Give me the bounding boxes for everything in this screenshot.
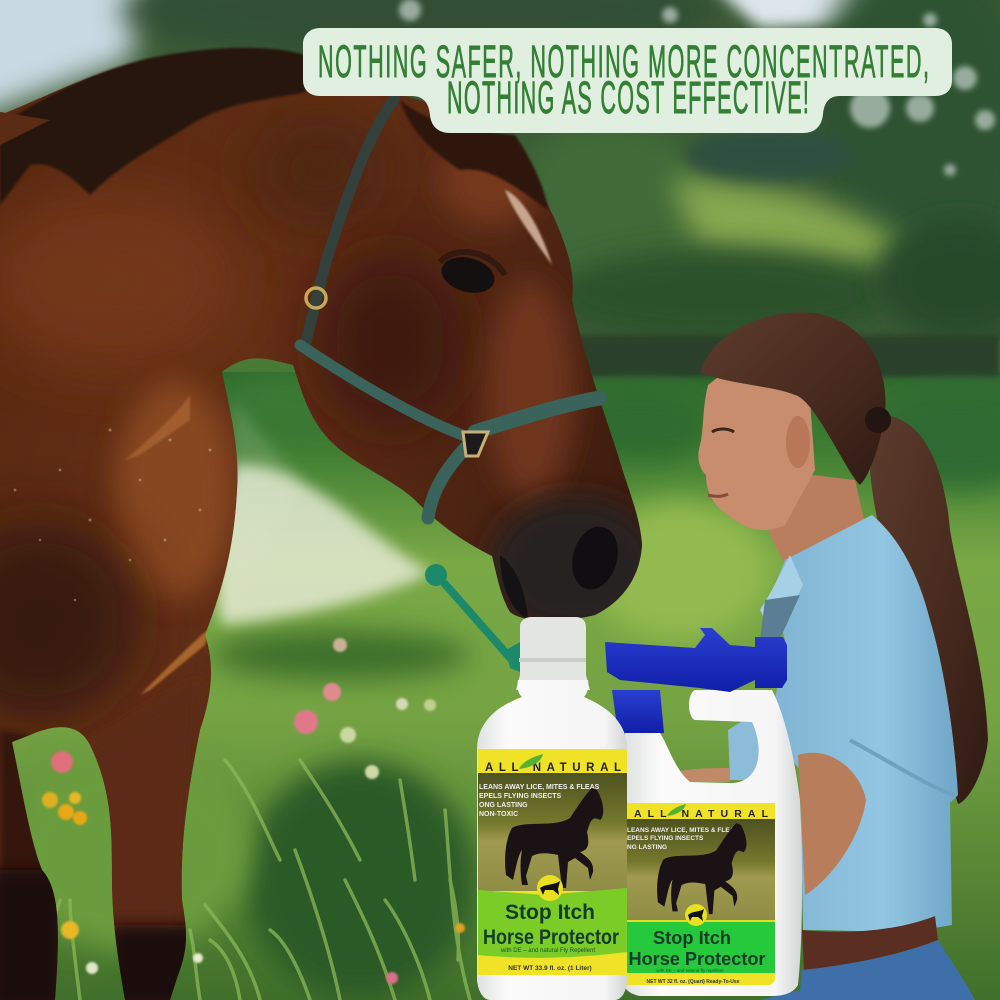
bottle: 1 liter concentrate — [477, 617, 627, 1000]
bottle: 1 liter concentrate: EPELS FLYING INSECTS — [479, 793, 562, 800]
jug label: Horse Protector — [628, 948, 766, 969]
belt — [802, 916, 938, 970]
jug label: EPELS FLYING INSECTS — [627, 835, 704, 842]
shirt — [770, 515, 958, 931]
horse — [0, 48, 660, 1000]
sprayer wand — [425, 564, 520, 672]
bottle: 1 liter concentrate: Stop Itch — [505, 901, 595, 924]
bottle: 1 liter concentrate: ALL NATURAL — [485, 762, 621, 774]
jug label: Stop Itch — [653, 927, 731, 948]
jeans — [760, 940, 975, 1000]
woman — [678, 312, 988, 1000]
bottle: 1 liter concentrate: ONG LASTING — [479, 802, 528, 809]
halter — [300, 98, 600, 518]
bottle: 1 liter concentrate: NET WT 33.9 fl. oz. (1 Liter) — [508, 965, 592, 972]
headline banner: NOTHING AS COST EFFECTIVE! — [447, 73, 809, 123]
jug label: ALL NATURAL — [634, 808, 769, 820]
bottle label — [478, 749, 627, 975]
horse image on bottle label — [505, 788, 603, 888]
ponytail — [870, 415, 988, 804]
blaze — [505, 190, 552, 265]
jug label: NG LASTING — [627, 844, 667, 851]
headline banner — [303, 28, 952, 133]
bottle: 1 liter concentrate: Horse Protector — [483, 926, 619, 949]
horse shading — [0, 110, 660, 1000]
mist spray — [216, 400, 432, 625]
neck — [770, 470, 870, 595]
jug body and handle — [625, 690, 802, 996]
grass and flowers in the foreground — [30, 638, 470, 1000]
bottle cap — [516, 617, 590, 690]
horse image on jug label — [657, 823, 746, 914]
bottle: 1 liter concentrate: LEANS AWAY LICE, MITES & FLEAS — [479, 784, 600, 791]
sprayer head — [605, 628, 787, 733]
forearm — [798, 753, 866, 895]
hair — [700, 312, 886, 485]
eye — [438, 252, 498, 298]
jug label: with DE – and natural fly repellent — [656, 968, 724, 973]
jug label — [626, 803, 775, 985]
bottle: 1 liter concentrate: NON-TOXIC — [479, 811, 518, 818]
mane — [0, 48, 305, 205]
nostril and muzzle — [565, 521, 625, 595]
face — [698, 360, 815, 530]
bottle body — [477, 680, 627, 1000]
bottle: ready-to-use hose-end sprayer — [605, 628, 802, 996]
bottle: 1 liter concentrate: with DE – and natural Fly Repellent — [500, 948, 595, 954]
headline text: NOTHING SAFER, NOTHING MORE CONCENTRATED, — [318, 37, 929, 87]
jug label: LEANS AWAY LICE, MITES & FLEAS — [627, 827, 739, 834]
jug label: NET WT 32 fl. oz. (Quart) Ready-To-Use — [647, 979, 740, 985]
